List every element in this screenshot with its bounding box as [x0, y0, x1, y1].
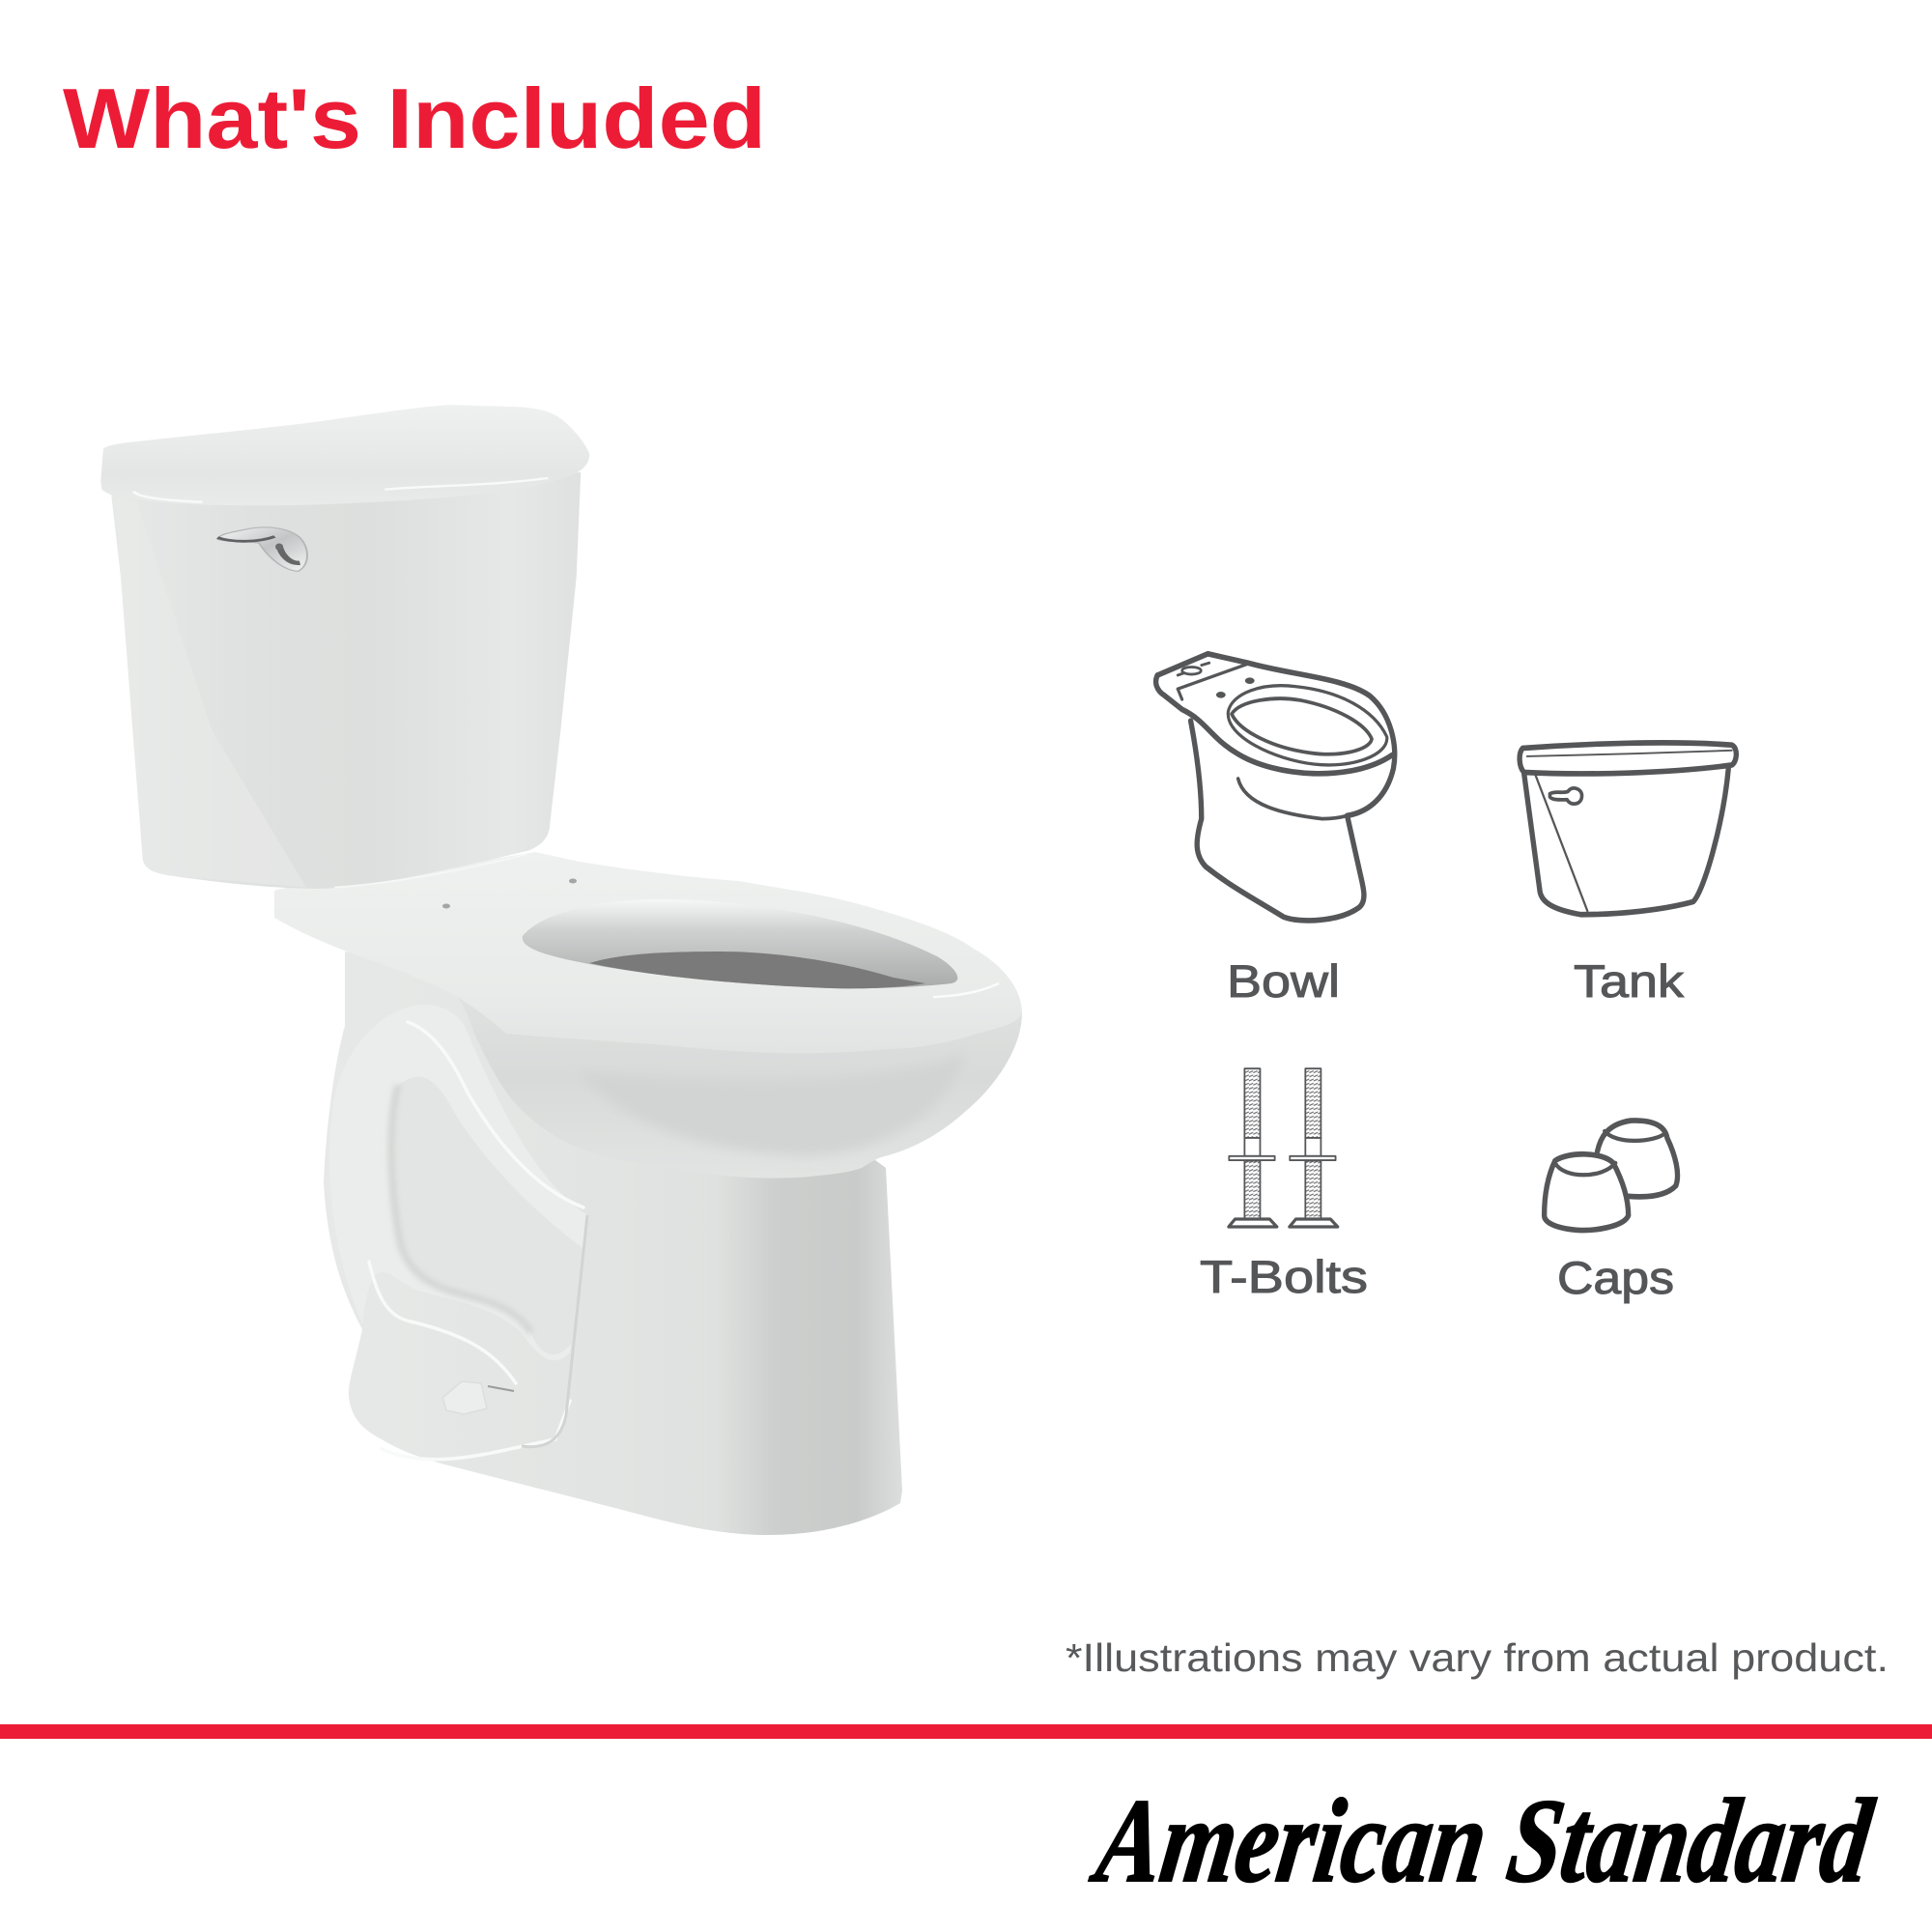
bowl rim and tank deck	[274, 852, 1022, 1053]
label: bowl: Bowl	[1227, 955, 1340, 1007]
bolt metal sliver	[488, 1386, 514, 1391]
icon: t-bolts	[1229, 1068, 1338, 1227]
tank lid	[100, 405, 589, 505]
label: caps: Caps	[1557, 1252, 1674, 1303]
bowl shadow	[580, 1053, 966, 1155]
icon: caps	[1545, 1121, 1678, 1231]
parts icons panel	[1156, 654, 1736, 1303]
recess soft edge	[391, 1085, 531, 1333]
product photo: toilet	[100, 405, 1022, 1535]
tank body	[111, 472, 581, 889]
red divider bar	[0, 1724, 1932, 1739]
title: What's Included	[63, 71, 766, 166]
toilet pedestal and trapway	[324, 952, 902, 1535]
label: tank: Tank	[1574, 955, 1685, 1007]
label: t-bolts: T-Bolts	[1200, 1251, 1368, 1302]
disclaimer note: *Illustrations may vary from actual product.	[1065, 1635, 1889, 1680]
outer ridge	[329, 1005, 587, 1360]
flush lever	[217, 527, 307, 571]
bowl opening	[523, 899, 957, 988]
water surface	[589, 952, 925, 988]
trapway recess	[391, 1077, 585, 1354]
toilet bowl body	[458, 956, 1022, 1179]
tank facet	[115, 497, 306, 888]
lid edge highlight	[133, 478, 548, 502]
rim lower highlight	[933, 983, 999, 997]
mounting bolt cap	[442, 1381, 487, 1414]
tank base highlight	[334, 854, 526, 888]
mounting holes	[442, 879, 577, 908]
toilet tank	[100, 405, 589, 889]
icon: bowl	[1156, 654, 1395, 921]
icon: tank	[1520, 743, 1736, 915]
trapway edge highlights	[369, 1022, 583, 1460]
trapway contour shadow	[522, 1215, 587, 1447]
